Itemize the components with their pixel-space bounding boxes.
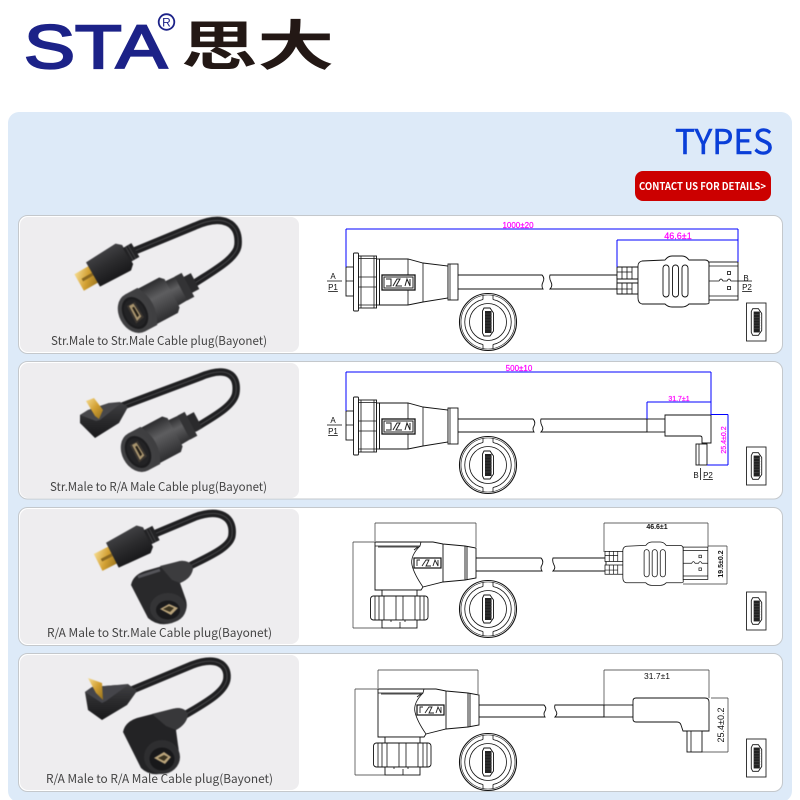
dimension lines bbox=[355, 670, 728, 775]
dimension 1000: 1000±20 bbox=[502, 221, 534, 230]
plug side view bbox=[605, 542, 708, 585]
dimension 19.5: 19.5±0.2 bbox=[718, 550, 725, 578]
connector front view bbox=[460, 436, 516, 494]
technical drawing bbox=[353, 523, 766, 638]
panel: R/A Male to Str.Male bbox=[18, 508, 782, 646]
card background bbox=[18, 654, 782, 792]
card background bbox=[18, 216, 782, 354]
connector side view bbox=[346, 253, 458, 311]
caption: R/A Male to R/A Male Cable plug(Bayonet) bbox=[46, 770, 273, 787]
plug end view bbox=[746, 592, 766, 630]
photo panel bbox=[20, 363, 299, 498]
button: contact us bbox=[635, 171, 771, 201]
connector front view bbox=[460, 294, 516, 350]
section label B P2 bbox=[738, 274, 752, 292]
plug end view bbox=[746, 739, 766, 777]
technical drawing bbox=[327, 221, 766, 350]
photo panel bbox=[20, 655, 299, 790]
angled plug side view bbox=[647, 415, 711, 465]
dimension lines bbox=[346, 229, 738, 267]
angled connector side view bbox=[374, 689, 479, 775]
connector front view bbox=[460, 734, 516, 790]
heading: TYPES: TYPES bbox=[675, 115, 773, 164]
cable bbox=[479, 705, 604, 717]
dimension lines bbox=[353, 523, 727, 628]
logo bbox=[24, 2, 334, 81]
section label A P1: A bbox=[330, 272, 336, 281]
section label A P1: P1 bbox=[328, 427, 338, 436]
dimension 31.7: 31.7±1 bbox=[644, 671, 670, 681]
connector side view bbox=[346, 397, 458, 455]
section label A P1 bbox=[327, 272, 342, 292]
dimension 46.6: 46.6±1 bbox=[646, 524, 668, 531]
section label A P1: P1 bbox=[328, 283, 338, 292]
photo: straight plug to angled connector cable bbox=[91, 513, 232, 624]
connector front view bbox=[460, 580, 516, 638]
cable bbox=[458, 275, 617, 289]
card background bbox=[18, 362, 782, 499]
technical drawing bbox=[355, 670, 766, 790]
cable bbox=[458, 419, 647, 432]
cable bbox=[476, 558, 606, 571]
dimension 31.7: 31.7±1 bbox=[668, 396, 690, 403]
card background bbox=[18, 508, 782, 646]
photo: straight plug to straight connector cable bbox=[71, 220, 238, 339]
caption: R/A Male to Str.Male Cable plug(Bayonet) bbox=[47, 624, 272, 641]
angled plug side view bbox=[604, 698, 709, 752]
photo: angled plug to angled connector cable bbox=[85, 661, 227, 774]
photo panel bbox=[20, 217, 299, 352]
logo: Chinese name: 思大 bbox=[181, 2, 334, 81]
plug end view bbox=[746, 447, 766, 485]
logo: registered mark bbox=[159, 14, 174, 30]
dimension lines bbox=[346, 372, 728, 465]
section label B P2 bbox=[693, 468, 713, 480]
section label B P2: P2 bbox=[742, 283, 752, 292]
panel: R/A Male to R/A Male bbox=[18, 654, 782, 792]
logo: registered mark: R bbox=[162, 16, 171, 30]
section label A P1 bbox=[327, 416, 342, 436]
button: contact us: CONTACT US FOR DETAILS> bbox=[639, 179, 766, 194]
panel: Str.Male to R/A Male bbox=[18, 362, 782, 499]
plug side view bbox=[617, 256, 738, 307]
technical drawing bbox=[327, 364, 766, 494]
photo: angled plug to straight connector cable bbox=[80, 372, 236, 478]
dimension 500: 500±10 bbox=[506, 364, 533, 373]
section label B P2: P2 bbox=[703, 471, 713, 480]
section label B P2: B bbox=[693, 471, 699, 480]
photo panel bbox=[20, 509, 299, 644]
panel: Str.Male to Str.Male bbox=[18, 216, 782, 354]
angled connector side view bbox=[370, 542, 476, 628]
dimension 25.4: 25.4±0.2 bbox=[721, 426, 728, 454]
caption: Str.Male to R/A Male Cable plug(Bayonet) bbox=[50, 478, 267, 495]
dimension 25.4: 25.4±0.2 bbox=[716, 708, 726, 742]
dimension 46.6: 46.6±1 bbox=[664, 231, 692, 241]
section label B P2: B bbox=[743, 274, 749, 283]
logo: STA wordmark: STA bbox=[24, 13, 167, 81]
caption: Str.Male to Str.Male Cable plug(Bayonet) bbox=[51, 332, 267, 349]
section label A P1: A bbox=[330, 416, 336, 425]
plug end view bbox=[746, 303, 766, 341]
